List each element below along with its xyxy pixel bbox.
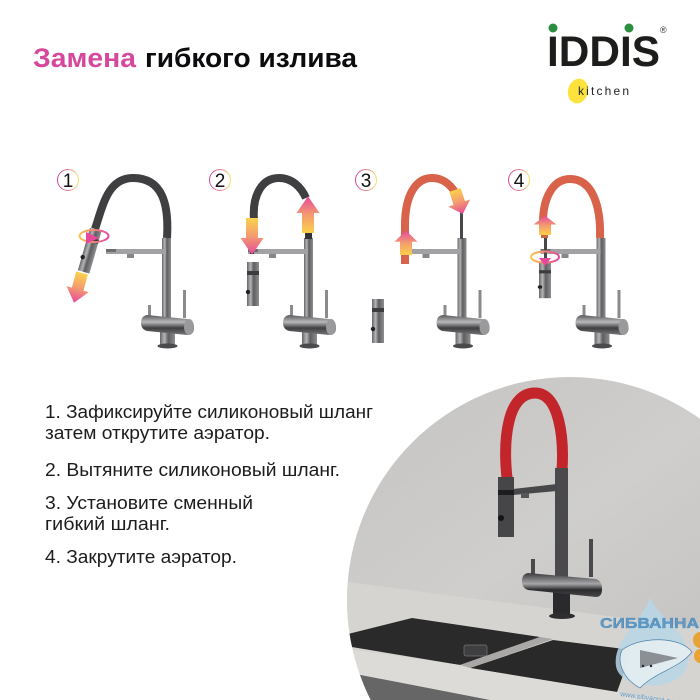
arrow 1 <box>63 270 93 306</box>
logo: IDDIS kitchen <box>547 24 667 106</box>
step number 4 <box>508 170 530 192</box>
watermark: Sibvanna: СИБВАННА <box>600 615 699 632</box>
step number 1 <box>58 170 78 192</box>
sink left basin <box>340 618 540 665</box>
step 1 diagram <box>58 170 194 348</box>
title: Замена <box>33 43 137 73</box>
step number 1: 1 <box>63 171 73 192</box>
aerator 4 <box>538 263 551 298</box>
photo faucet <box>498 393 602 619</box>
arrow down 2 <box>240 218 264 255</box>
hose 2 <box>254 178 306 220</box>
step number 2 <box>210 170 230 192</box>
title <box>33 43 358 73</box>
logo: IDDIS kitchen: ® <box>660 25 667 35</box>
title: гибкого излива <box>145 43 358 73</box>
arrow curved 3 <box>444 186 474 218</box>
faucet 3 body <box>402 238 490 348</box>
orange fruit <box>693 632 700 663</box>
rotation ring 1 <box>80 230 108 244</box>
counter front <box>354 658 617 692</box>
step 4 diagram <box>508 170 628 348</box>
logo: IDDIS kitchen: IDDIS <box>547 28 660 76</box>
instructions text: 3. Установите сменный <box>45 492 253 513</box>
step number 2: 2 <box>215 171 225 192</box>
countertop <box>340 581 700 700</box>
hose 3 <box>405 178 455 264</box>
aerator 1 <box>77 228 102 274</box>
instructions text <box>45 401 373 567</box>
wall <box>340 370 700 630</box>
sink divider <box>460 637 553 668</box>
hose 4 <box>543 179 600 238</box>
instructions text: 1. Зафиксируйте силиконовый шланг <box>45 401 373 422</box>
instructions text: 4. Закрутите аэратор. <box>45 546 237 567</box>
faucet 2 body <box>248 238 336 348</box>
sink right basin <box>470 640 632 692</box>
sink drain <box>464 645 487 656</box>
aerator 2 <box>246 262 259 306</box>
rotation ring 4 <box>531 252 559 266</box>
aerator 3 <box>371 299 384 343</box>
instructions text: затем открутите аэратор. <box>45 422 270 443</box>
arrow up 3 <box>394 230 418 255</box>
kitchen photo <box>340 370 700 700</box>
logo: IDDIS kitchen: kitchen <box>578 84 629 98</box>
arrow up 4 <box>534 216 556 235</box>
step number 4: 4 <box>514 171 525 192</box>
arrow up 2 <box>296 196 320 233</box>
step 3 diagram <box>356 170 490 348</box>
instructions text: 2. Вытяните силиконовый шланг. <box>45 459 340 480</box>
instructions text: гибкий шланг. <box>45 513 170 534</box>
step number 3 <box>356 170 376 192</box>
step 2 diagram <box>210 170 336 348</box>
step number 3: 3 <box>361 171 371 192</box>
hose 1 <box>95 178 167 238</box>
watermark: Sibvanna <box>600 597 699 700</box>
faucet 4 body <box>540 238 628 348</box>
faucet 1 body <box>106 238 194 348</box>
